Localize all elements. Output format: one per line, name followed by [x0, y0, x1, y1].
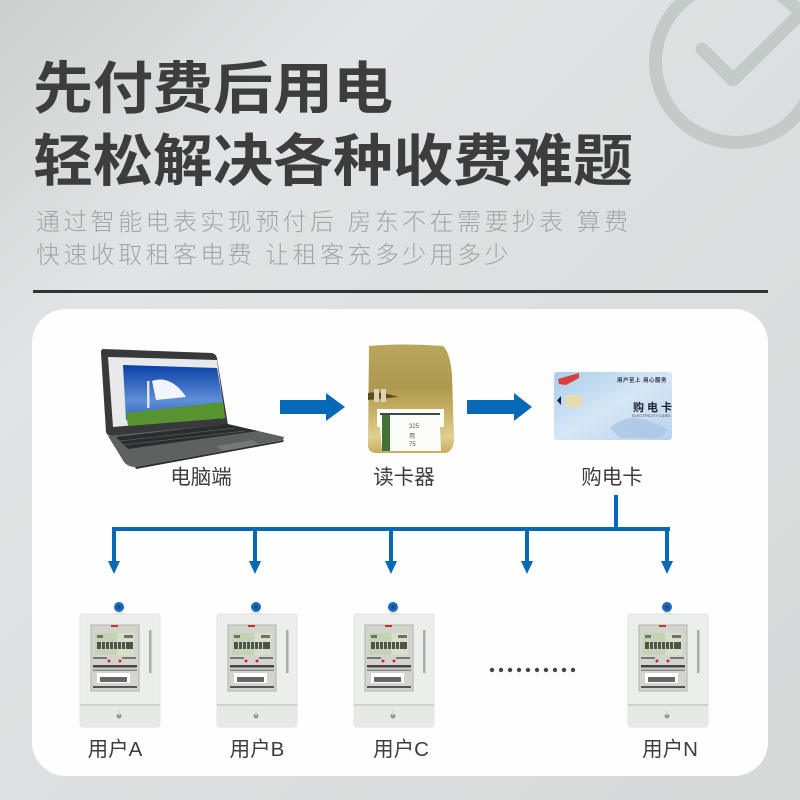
label: user B: 用户B: [230, 738, 284, 761]
title: 先付费后用电: [33, 57, 393, 120]
label: user N: 用户N: [642, 738, 698, 761]
label: purchase card: 购电卡: [581, 466, 643, 488]
ellipsis dots: [490, 668, 575, 672]
icon: meter A: [80, 602, 160, 727]
icon: meter C: [354, 602, 434, 727]
icon: electricity card: [554, 372, 675, 440]
label: user A: 用户A: [88, 738, 142, 761]
icon: electricity card: 购电卡: [633, 400, 675, 414]
arrow: reader to card: [467, 393, 532, 421]
subtitle text: 通过智能电表实现预付后 房东不在需要抄表 算费: [36, 209, 632, 236]
icon: card reader: [368, 344, 454, 453]
distribution connector lines: [108, 495, 673, 574]
icon: electricity card: 用户至上 用心服务: [617, 376, 667, 384]
icon: electricity card: ELECTRICITY CARD: [632, 413, 670, 418]
panel: prepayment flow: [32, 309, 768, 776]
subtitle text: 快速收取租客电费 让租客充多少用多少: [36, 242, 512, 269]
title: [33, 57, 633, 193]
icon: card reader: 75: [409, 442, 416, 448]
icon: meter B: [217, 602, 297, 727]
label: computer: 电脑端: [170, 466, 232, 488]
title: 轻松解决各种收费难题: [33, 130, 633, 193]
icon: card reader: 325: [409, 424, 420, 430]
label: card reader: 读卡器: [373, 466, 435, 488]
arrow: laptop to reader: [280, 393, 345, 421]
icon: meter N: [628, 602, 708, 727]
icon: laptop: [101, 349, 284, 469]
background check-mark icon: [649, 0, 800, 149]
icon: card reader: 用: [409, 433, 415, 440]
subtitle text: [36, 209, 632, 269]
label: user C: 用户C: [373, 738, 429, 761]
heading divider: [33, 290, 768, 293]
